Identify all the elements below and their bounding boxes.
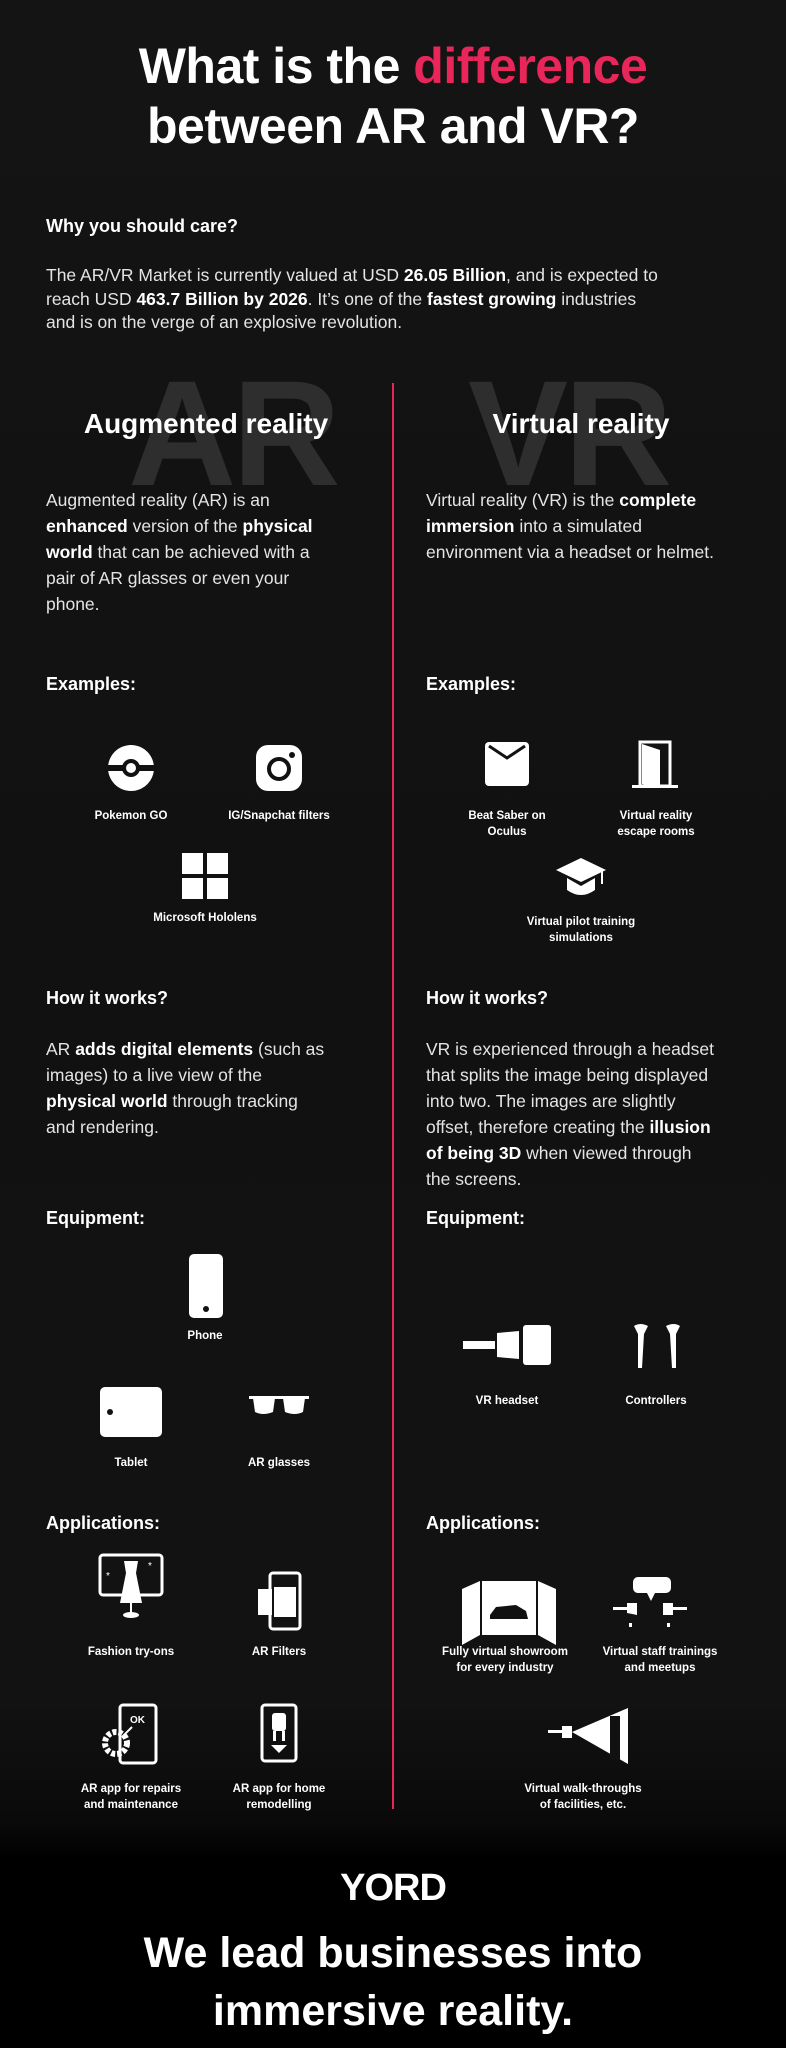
AR examples heading: Examples: — [46, 674, 136, 694]
icon: instagram — [256, 745, 302, 791]
label: pokemon go: Pokemon GO — [95, 810, 167, 822]
label: walkthrough — [524, 1783, 642, 1811]
icon: beat saber — [485, 742, 529, 786]
VR how text: into two. The images are slightly — [426, 1091, 676, 1111]
label: repairs: AR app for repairs — [81, 1783, 181, 1795]
VR how text — [426, 1039, 714, 1189]
icon: windows — [182, 853, 228, 899]
heading: augmented reality: Augmented reality — [84, 408, 328, 439]
title: What is the difference — [139, 38, 647, 94]
label: home remodelling: remodelling — [246, 1799, 312, 1811]
subheading: why care: Why you should care? — [46, 216, 238, 236]
icon: home remodelling — [260, 1704, 298, 1762]
label: home remodelling — [232, 1783, 325, 1811]
label: repairs: and maintenance — [84, 1799, 178, 1811]
label: repairs — [81, 1783, 181, 1811]
VR how heading: How it works? — [426, 988, 548, 1008]
AR description: Augmented reality (AR) is an — [46, 490, 270, 510]
VR how text: that splits the image being displayed — [426, 1065, 708, 1085]
icon: AR glasses — [249, 1396, 309, 1414]
label: showroom: for every industry — [456, 1662, 554, 1674]
VR description — [426, 490, 714, 562]
icon: fashion — [98, 1554, 164, 1618]
AR how heading: How it works? — [46, 988, 168, 1008]
AR description: enhanced version of the physical — [46, 516, 313, 536]
divider line — [392, 383, 394, 1809]
tagline: We lead businesses into — [144, 1929, 642, 1977]
label: escape rooms: Virtual reality — [620, 810, 692, 822]
label: showroom — [442, 1646, 568, 1674]
VR how text: the screens. — [426, 1169, 521, 1189]
label: beat saber — [468, 810, 546, 838]
icon: walkthrough — [548, 1708, 628, 1764]
icon: repairs — [102, 1704, 158, 1764]
VR how text: of being 3D when viewed through — [426, 1143, 692, 1163]
icon: AR filters — [258, 1572, 302, 1630]
label: staff trainings: Virtual staff trainings — [603, 1646, 717, 1658]
label: VR headset: VR headset — [476, 1395, 538, 1407]
label: home remodelling: AR app for home — [233, 1783, 325, 1795]
AR how text — [46, 1039, 324, 1137]
label: phone: Phone — [187, 1330, 223, 1342]
label: hololens: Microsoft Hololens — [153, 912, 257, 924]
icon: door — [632, 740, 678, 788]
AR how text: images) to a live view of the — [46, 1065, 262, 1085]
tagline — [144, 1929, 642, 2035]
intro paragraph: reach USD 463.7 Billion by 2026. It’s one of the fastest growing industries — [46, 288, 636, 308]
icon: controllers — [634, 1324, 680, 1368]
icon: staff trainings — [613, 1577, 687, 1627]
label: walkthrough: of facilities, etc. — [540, 1799, 626, 1811]
label: IG filters: IG/Snapchat filters — [228, 810, 330, 822]
VR applications heading: Applications: — [426, 1513, 540, 1533]
ghost letters VR: VR — [468, 349, 668, 517]
label: fashion: Fashion try-ons — [88, 1646, 174, 1658]
VR examples heading: Examples: — [426, 674, 516, 694]
label: tablet: Tablet — [114, 1457, 148, 1469]
icon: VR headset — [463, 1325, 551, 1365]
label: escape rooms — [617, 810, 695, 838]
label: AR glasses: AR glasses — [248, 1457, 310, 1469]
AR how text: and rendering. — [46, 1117, 159, 1137]
label: showroom: Fully virtual showroom — [442, 1646, 568, 1658]
VR how text: offset, therefore creating the illusion — [426, 1117, 711, 1137]
VR description: environment via a headset or helmet. — [426, 542, 714, 562]
AR how text: AR adds digital elements (such as — [46, 1039, 324, 1059]
icon: phone — [189, 1254, 223, 1318]
icon: fashion: * — [106, 1571, 110, 1582]
icon: repairs: OK — [130, 1715, 146, 1726]
label: pilot training: Virtual pilot training — [527, 916, 635, 928]
AR description: pair of AR glasses or even your — [46, 568, 289, 588]
label: staff trainings — [602, 1646, 717, 1674]
AR equipment heading: Equipment: — [46, 1208, 145, 1228]
heading: virtual reality: Virtual reality — [493, 408, 669, 439]
AR how text: physical world through tracking — [46, 1091, 298, 1111]
icon: graduation cap — [556, 858, 606, 895]
label: pilot training — [526, 916, 635, 944]
label: walkthrough: Virtual walk-throughs — [524, 1783, 642, 1795]
ghost letters AR: AR — [128, 349, 337, 517]
icon: pokeball — [108, 745, 154, 791]
intro paragraph: and is on the verge of an explosive revolution. — [46, 312, 402, 332]
label: pilot training: simulations — [549, 932, 613, 944]
icon: showroom — [462, 1581, 556, 1645]
label: beat saber: Beat Saber on — [468, 810, 546, 822]
VR description: immersion into a simulated — [426, 516, 642, 536]
icon: fashion: * — [148, 1561, 152, 1572]
VR equipment heading: Equipment: — [426, 1208, 525, 1228]
AR description: phone. — [46, 594, 100, 614]
intro paragraph: The AR/VR Market is currently valued at USD 26.05 Billion, and is expected to — [46, 265, 658, 285]
AR description — [46, 490, 313, 614]
label: escape rooms: escape rooms — [617, 826, 695, 838]
label: controllers: Controllers — [625, 1395, 687, 1407]
VR description: Virtual reality (VR) is the complete — [426, 490, 696, 510]
logo: YORD: YORD — [340, 1867, 446, 1909]
AR applications heading: Applications: — [46, 1513, 160, 1533]
title — [138, 38, 647, 154]
label: beat saber: Oculus — [488, 826, 526, 838]
AR description: world that can be achieved with a — [46, 542, 310, 562]
label: staff trainings: and meetups — [625, 1662, 695, 1674]
VR how text: VR is experienced through a headset — [426, 1039, 714, 1059]
icon: tablet — [100, 1387, 162, 1437]
title: between AR and VR? — [147, 98, 639, 154]
label: AR filters: AR Filters — [252, 1646, 306, 1658]
tagline: immersive reality. — [213, 1987, 573, 2035]
intro paragraph — [46, 265, 658, 332]
